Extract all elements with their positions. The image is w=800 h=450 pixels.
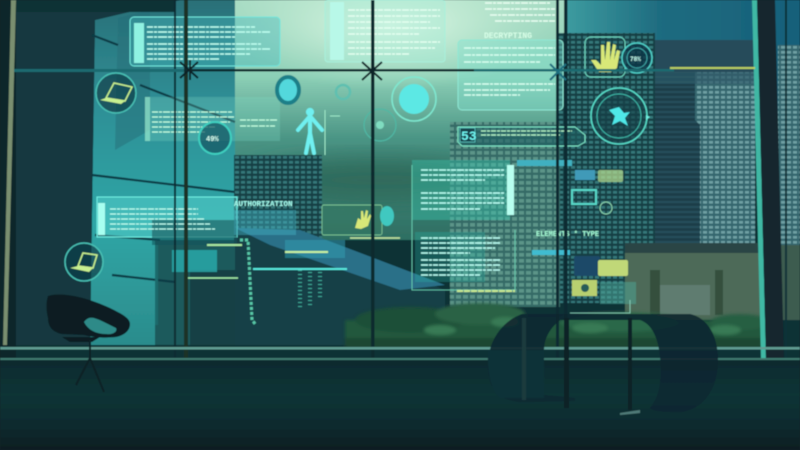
HUD: face and hand identification [322,205,400,238]
HUD: biometric orbs [277,77,436,141]
heading: authorization: AUTHORIZATION [234,201,293,209]
chair [46,294,130,392]
trees [345,303,770,348]
HUD panel: decrypting text [458,32,563,110]
figure: human body scan [298,108,340,155]
HUD panel: upper left text [130,17,280,66]
HUD panel: authorization [172,201,347,325]
gauge: 78 percent [622,43,652,73]
icon: laptop lower [65,243,103,281]
gauge: 49 percent: 49% [206,136,219,144]
target radar [591,88,650,144]
window frame [0,0,800,360]
number: 53: 53 [461,129,477,144]
icon: laptop upper [96,73,136,113]
icon: hand scan [585,37,625,77]
floor [0,358,800,450]
HUD panel: top centre text [325,0,555,62]
HUD panel: central bright text [412,160,515,291]
HUD panel: number 53 readout [458,127,585,146]
HUD panel: lower left text [97,197,237,245]
heading: decrypting: DECRYPTING [484,32,532,41]
heading: elements type: ELEMENTS * TYPE [536,231,599,239]
HUD panel: middle left text [145,97,280,141]
city buildings [234,33,800,345]
gauge: 78 percent: 78% [630,56,641,63]
HUD panel: elements type widgets [517,160,636,313]
bench [488,314,718,415]
gauge: 49 percent [199,122,231,154]
